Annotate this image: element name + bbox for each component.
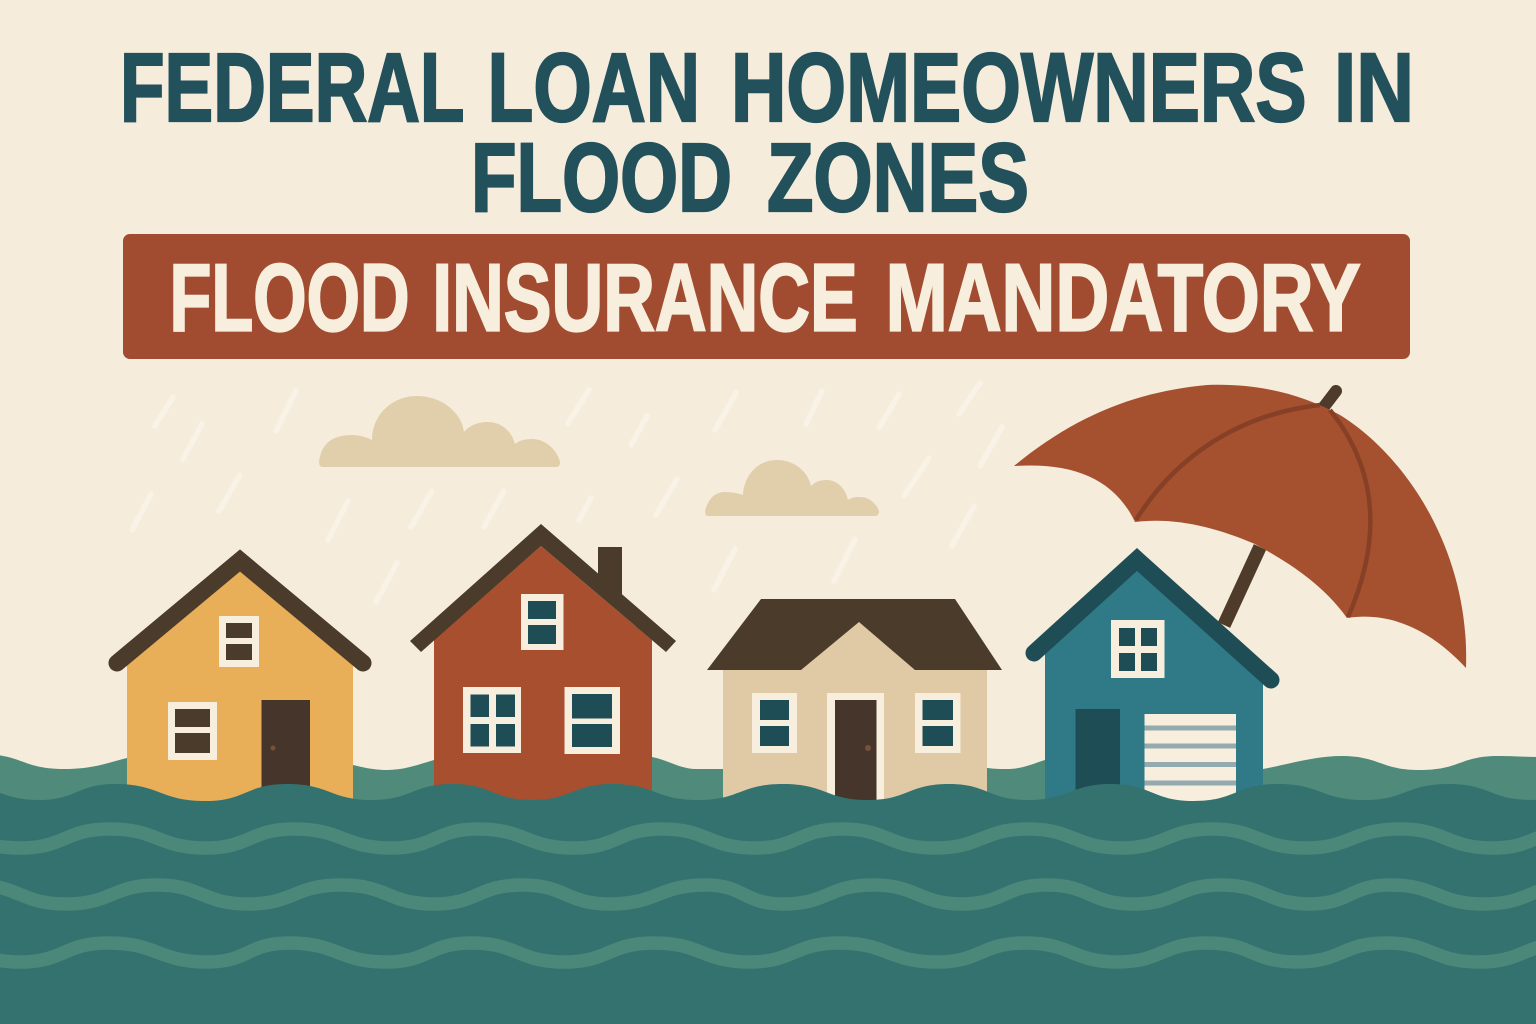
cloud 1 [319,396,560,467]
yellow house body [127,571,353,815]
blue house body [1045,569,1263,815]
house: red [410,524,676,815]
yellow house upper window [219,616,259,667]
banner: flood insurance mandatory [123,234,1410,359]
back water [0,754,1536,1024]
umbrella [1014,385,1466,668]
title: FEDERAL [120,33,464,142]
title [120,33,1414,232]
beige house left window [752,693,797,753]
beige house body [723,621,987,815]
yellow house lower window [168,702,217,760]
blue house window [1111,620,1164,678]
beige house right window [915,693,960,753]
yellow house roof [117,560,363,663]
beige house door [827,693,884,808]
blue house roof [1034,560,1271,680]
front water [0,784,1536,1024]
banner: flood insurance mandatory: INSURANCE [432,245,858,351]
wave lines [0,829,1536,962]
red house upper window [521,594,564,650]
house: blue [1034,560,1271,815]
red house chimney [598,547,622,612]
title: ZONES [767,123,1029,232]
title: HOMEOWNERS [731,33,1306,142]
rain [132,383,1002,602]
yellow house door [262,700,310,805]
title: FLOOD [471,123,732,232]
cloud 2 [705,460,879,516]
umbrella canopy [1014,385,1466,668]
red house lower right window [564,687,620,754]
umbrella ribs [1136,405,1370,617]
blue house door [1076,709,1120,809]
red house roof [410,524,676,652]
beige house roof [707,599,1002,670]
umbrella handle [1224,547,1260,625]
blue house garage door [1144,714,1236,810]
house: yellow [117,560,363,815]
red house lower left window [463,687,521,753]
title: IN [1334,33,1414,142]
red house body [434,546,652,815]
umbrella tip [1320,391,1336,412]
banner: flood insurance mandatory: MANDATORY [886,245,1361,351]
house: beige [707,599,1002,815]
banner: flood insurance mandatory: FLOOD [170,245,410,351]
title: LOAN [488,33,700,142]
